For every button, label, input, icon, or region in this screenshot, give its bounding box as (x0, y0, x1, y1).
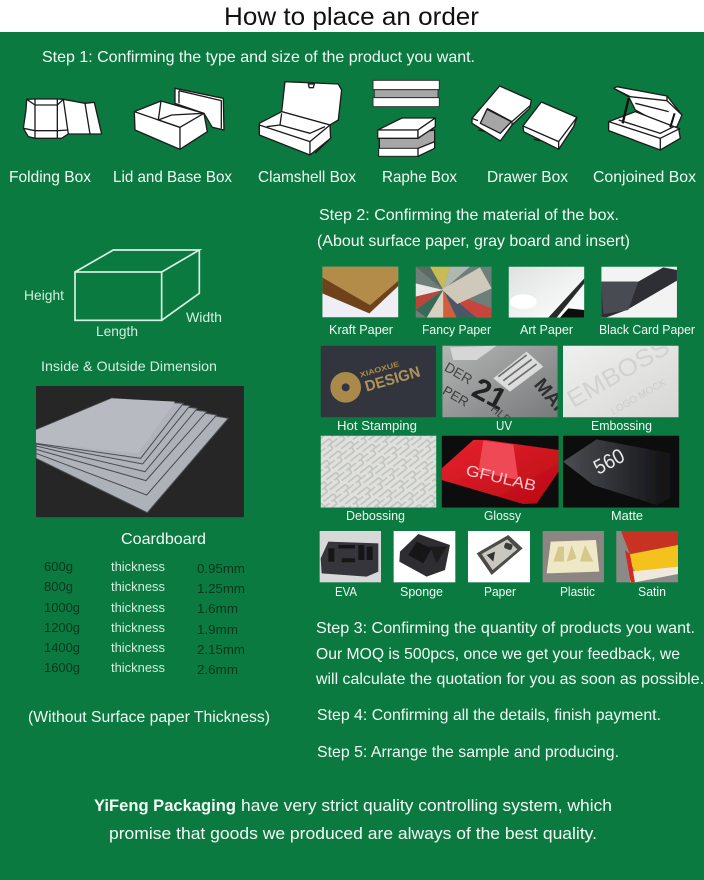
row 600g: 0.95mm (197, 561, 245, 576)
photo: glossy: GFULAB (464, 462, 538, 495)
label: debossing: Debossing (346, 508, 405, 523)
photo: hot stamping: XIAOXUE (359, 359, 400, 379)
row 1400g: 1400g (44, 640, 80, 655)
step 4 text: Step 4: Confirming all the details, finish payment. (317, 707, 661, 724)
photo: uv: 21 (467, 372, 512, 417)
label: width: Width (186, 309, 222, 325)
photo: uv: PER (440, 383, 471, 410)
label: raphe box: Raphe Box (382, 169, 457, 186)
row 600g: thickness (111, 559, 165, 574)
label: hot stamping: Hot Stamping (337, 418, 417, 433)
row 1000g: 1000g (44, 600, 80, 615)
row 1400g: 2.15mm (197, 642, 245, 657)
title band (0, 0, 704, 32)
photo: satin (616, 531, 678, 582)
icon: raphe box (373, 80, 439, 156)
step 5 text: Step 5: Arrange the sample and producing. (317, 744, 619, 761)
row 1600g: 1600g (44, 660, 80, 675)
photo: debossing (321, 436, 436, 508)
row 1000g: thickness (111, 600, 165, 615)
step 3 text: will calculate the quotation for you as soon as possible. (315, 671, 704, 688)
photo: kraft paper (322, 267, 398, 317)
step 3 text (315, 620, 704, 688)
photo: hot stamping: DESIGN (363, 364, 422, 395)
photo: sponge (394, 531, 455, 582)
label: glossy: Glossy (484, 508, 521, 523)
photo: black card paper (601, 267, 677, 318)
photo: eva (320, 531, 381, 582)
photo: coardboard stack (36, 386, 244, 517)
photo: paper insert (468, 531, 530, 582)
label: clamshell box: Clamshell Box (258, 169, 356, 186)
row 1400g: thickness (111, 640, 165, 655)
row 1200g: 1.9mm (197, 622, 238, 637)
photo: glossy (442, 436, 559, 508)
photo: embossing: EMBOSS (563, 333, 674, 414)
dimension diagram (24, 250, 222, 374)
note: without surface paper thickness: (Without Surface paper Thickness) (28, 709, 270, 726)
label: matte: Matte (611, 508, 643, 523)
label: lid and base box: Lid and Base Box (113, 169, 232, 186)
photo: embossing: LOGO MOCK (609, 377, 668, 418)
label: kraft paper: Kraft Paper (329, 322, 394, 337)
material swatches: surface paper (322, 267, 696, 337)
step 2 subheading: (About surface paper, gray board and insert) (317, 233, 630, 250)
photo: matte (563, 436, 679, 508)
box types row (9, 80, 696, 186)
row 1400g (44, 640, 245, 657)
icon: lid and base box (134, 88, 224, 149)
row 800g: thickness (111, 579, 165, 594)
icon: cuboid outline (75, 250, 199, 320)
icon: conjoined box (609, 87, 682, 150)
label: length: Length (96, 323, 138, 339)
icon: clamshell box (259, 82, 342, 155)
title: How to place an order (224, 3, 479, 31)
row 1200g: thickness (111, 620, 165, 635)
label: fancy paper: Fancy Paper (422, 322, 492, 337)
closing statement (94, 796, 612, 843)
photo: plastic insert (543, 531, 604, 582)
row 1000g (44, 600, 238, 616)
photo: matte: 560 (590, 444, 629, 479)
label: embossing: Embossing (591, 418, 652, 433)
heading: coardboard: Coardboard (121, 531, 206, 548)
icon: drawer box (472, 86, 577, 149)
icon: folding box (23, 99, 102, 138)
closing statement: promise that goods we produced are always of the best quality. (109, 824, 597, 843)
row 1200g (44, 620, 238, 637)
label: drawer box: Drawer Box (487, 169, 568, 186)
label: black card paper: Black Card Paper (599, 322, 696, 337)
caption: inside and outside dimension: Inside & Outside Dimension (41, 358, 217, 374)
label: art paper: Art Paper (520, 322, 574, 337)
photo: uv: MAKE (529, 375, 582, 432)
coardboard thickness table (44, 559, 245, 677)
step 1 heading: Step 1: Confirming the type and size of the product you want. (42, 49, 475, 66)
step 3 text: Step 3: Confirming the quantity of products you want. (316, 620, 695, 637)
label: conjoined box: Conjoined Box (593, 169, 696, 186)
row 800g: 1.25mm (197, 581, 245, 596)
label: uv: UV (496, 418, 512, 433)
photo: uv: DER (442, 359, 475, 387)
photo: fancy paper (416, 267, 492, 318)
label: eva: EVA (335, 584, 357, 599)
photo: hot stamping (321, 346, 436, 417)
row 1600g: thickness (111, 660, 165, 675)
closing statement: have very strict quality controlling system, which (241, 796, 612, 815)
material swatches: finishes row 1 (320, 346, 679, 432)
label: height: Height (24, 287, 64, 303)
row 1200g: 1200g (44, 620, 80, 635)
label: sponge: Sponge (400, 584, 443, 599)
row 800g (44, 579, 245, 596)
closing statement: YiFeng Packaging (94, 796, 236, 815)
row 600g (44, 559, 245, 576)
step 3 text: Our MOQ is 500pcs, once we get your feedback, we (316, 646, 680, 663)
step 2 heading: Step 2: Confirming the material of the box. (319, 207, 619, 224)
row 600g: 600g (44, 559, 73, 574)
label: folding box: Folding Box (9, 169, 91, 186)
label: satin: Satin (638, 584, 666, 599)
material swatches: inserts (320, 531, 678, 599)
row 800g: 800g (44, 579, 73, 594)
row 1600g (44, 660, 238, 677)
photo: uv (442, 346, 558, 418)
photo: uv: HLB (488, 403, 513, 426)
label: plastic insert: Plastic (560, 584, 595, 599)
label: paper insert: Paper (484, 584, 517, 599)
row 1000g: 1.6mm (197, 601, 238, 616)
photo: art paper (509, 267, 584, 318)
material swatches: finishes row 2 (321, 436, 679, 523)
row 1600g: 2.6mm (197, 662, 238, 677)
